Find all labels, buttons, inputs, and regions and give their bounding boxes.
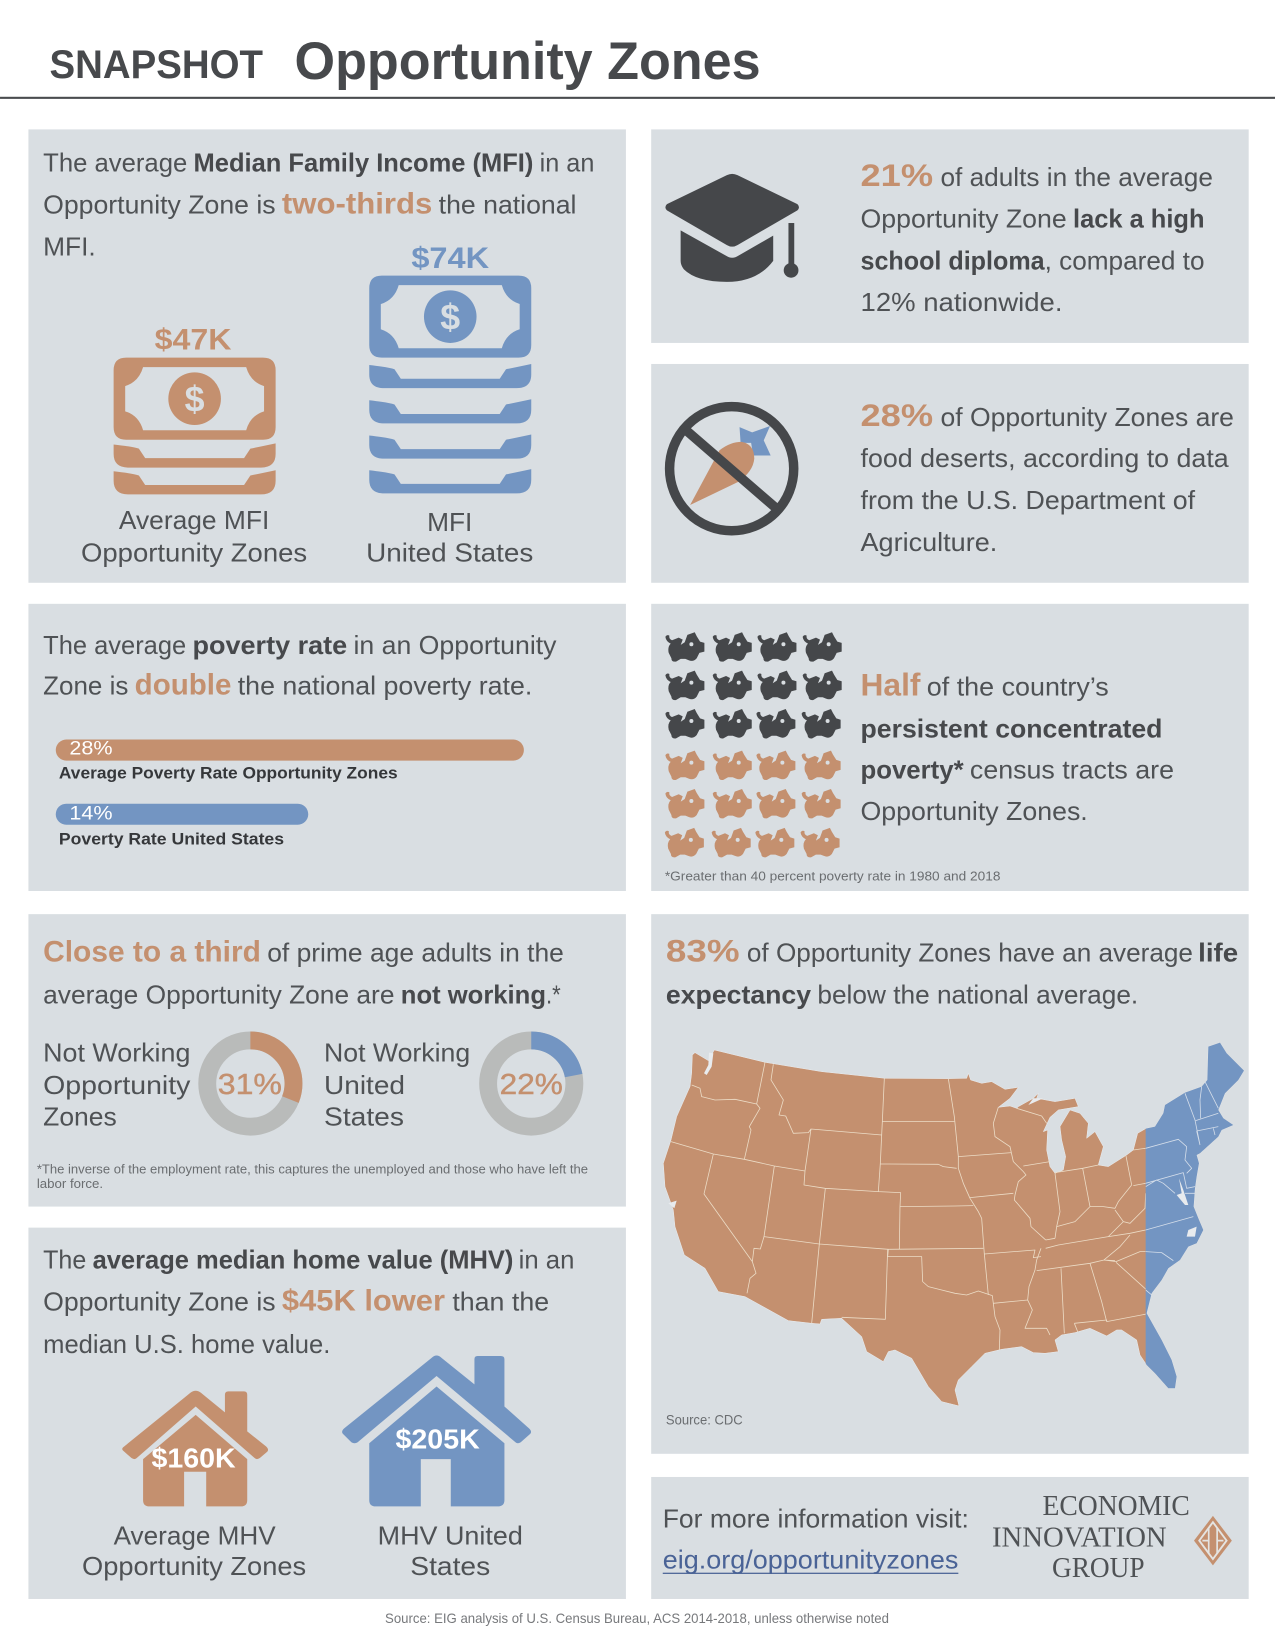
label: average MFI opportunity zones bbox=[81, 505, 307, 568]
text: food desert statement: of Opportunity Zones are bbox=[940, 402, 1234, 432]
text: home value statement: Opportunity Zone is bbox=[43, 1287, 276, 1317]
text: home value statement: The bbox=[43, 1245, 86, 1275]
text: life expectancy statement: life bbox=[1198, 937, 1238, 967]
panel: median family income bbox=[28, 129, 626, 583]
text: poverty tracts statement: poverty* bbox=[861, 754, 964, 784]
text: income statement bbox=[43, 147, 594, 262]
label: not working opportunity zones: Opportunity bbox=[43, 1070, 191, 1100]
text: diploma statement: lack a high bbox=[1073, 204, 1205, 234]
panel: poverty rate bbox=[28, 604, 626, 891]
text: not working statement: Close to a third bbox=[43, 935, 261, 968]
label: average MFI opportunity zones: Average MFI bbox=[119, 505, 269, 535]
label: MHV united states: States bbox=[410, 1551, 490, 1581]
donut chart: 22%: 22% bbox=[500, 1069, 563, 1101]
text: poverty statement: the national poverty rate. bbox=[238, 670, 532, 700]
logo: economic innovation group wordmark bbox=[992, 1491, 1190, 1584]
logo: economic innovation group wordmark: GROUP bbox=[1052, 1553, 1145, 1584]
text: poverty statement bbox=[43, 630, 557, 701]
text: income statement: two-thirds bbox=[282, 188, 432, 221]
footnote: inverse of employment rate bbox=[37, 1162, 588, 1191]
icon: tan money stack $47K: $47K bbox=[155, 323, 231, 356]
bar: united states 14%: 14% bbox=[69, 803, 113, 824]
label: not working united states: Not Working bbox=[324, 1037, 470, 1067]
text: income statement: the national bbox=[439, 190, 576, 220]
panel: not working bbox=[28, 914, 626, 1207]
panel: more information and logo bbox=[651, 1477, 1249, 1599]
text: poverty tracts statement: Opportunity Zones. bbox=[861, 796, 1088, 826]
text: home value statement: than the bbox=[452, 1287, 549, 1317]
text: diploma statement: 12% nationwide. bbox=[861, 287, 1062, 317]
icon: blue money stack $74K: $74K bbox=[411, 242, 489, 275]
logo: economic innovation group wordmark: INNOVATION bbox=[992, 1522, 1167, 1553]
text: poverty statement: The average bbox=[43, 630, 186, 660]
bar: opportunity zones 28%: Average Poverty Rate Opportunity Zones bbox=[59, 764, 398, 782]
text: income statement: MFI. bbox=[43, 232, 96, 262]
text: not working statement: .* bbox=[546, 980, 561, 1010]
water: puget sound, chesapeake and pamlico sounds bbox=[668, 1053, 1197, 1237]
icon: tan house $160K bbox=[122, 1391, 268, 1506]
text: food desert statement: from the U.S. Department of bbox=[861, 485, 1196, 515]
text: income statement: The average bbox=[43, 147, 187, 177]
text: poverty tracts statement bbox=[861, 666, 1174, 826]
icon: blue money stack $74K: $ bbox=[440, 297, 460, 337]
label: not working opportunity zones: Zones bbox=[43, 1102, 117, 1132]
icon: blue house $205K bbox=[342, 1355, 531, 1506]
label: snapshot: SNAPSHOT bbox=[49, 43, 263, 87]
text: diploma statement: , compared to bbox=[1045, 245, 1205, 275]
icon: blue money stack $74K bbox=[369, 242, 531, 493]
text: food desert statement: food deserts, according to data bbox=[861, 443, 1229, 473]
label: average MHV opportunity zones bbox=[82, 1520, 306, 1581]
footnote: inverse of employment rate: labor force. bbox=[37, 1177, 103, 1191]
text: diploma statement bbox=[861, 157, 1213, 317]
label: not working opportunity zones: Not Working bbox=[43, 1037, 190, 1067]
logo: diamond emblem bbox=[1194, 1516, 1232, 1565]
donut chart: 22% bbox=[488, 1040, 574, 1127]
text: not working statement: of prime age adults in the bbox=[267, 937, 564, 967]
text: poverty statement: Zone is bbox=[43, 670, 128, 700]
text: poverty tracts statement: persistent concentrated bbox=[861, 713, 1162, 743]
donut chart: 31% bbox=[207, 1040, 294, 1127]
text: home value statement: in an bbox=[519, 1245, 574, 1275]
text: home value statement: $45K lower bbox=[282, 1285, 446, 1318]
text: diploma statement: 21% bbox=[861, 157, 933, 193]
text: life expectancy statement: below the national average. bbox=[817, 980, 1138, 1010]
icon: tan house $160K: $160K bbox=[151, 1442, 236, 1473]
text: income statement: Opportunity Zone is bbox=[43, 190, 276, 220]
text: home value statement: median U.S. home value. bbox=[43, 1329, 330, 1359]
label: MHV united states bbox=[378, 1520, 523, 1581]
panel: median home value bbox=[28, 1228, 626, 1599]
bar: opportunity zones 28% bbox=[56, 738, 524, 782]
text: life expectancy statement: 83% bbox=[666, 932, 740, 968]
panel: high school diploma bbox=[651, 129, 1249, 343]
text: food desert statement: 28% bbox=[861, 397, 933, 433]
label: not working united states bbox=[324, 1037, 470, 1132]
label: MFI united states: United States bbox=[366, 538, 533, 568]
icon: tan money stack $47K: $ bbox=[185, 379, 205, 419]
bar chart: poverty rates bbox=[56, 738, 524, 849]
bar: united states 14% bbox=[56, 803, 308, 849]
text: poverty tracts statement: Half bbox=[861, 666, 921, 702]
text: poverty statement: double bbox=[135, 668, 231, 701]
text: poverty statement: in an Opportunity bbox=[353, 630, 557, 660]
label: average MFI opportunity zones: Opportunity Zones bbox=[81, 538, 307, 568]
header: snapshot title bbox=[49, 32, 761, 91]
text: diploma statement: of adults in the average bbox=[940, 162, 1213, 192]
text: home value statement bbox=[43, 1245, 574, 1359]
icon: tan money stack $47K bbox=[114, 323, 276, 494]
footnote: poverty definition: *Greater than 40 percent poverty rate in 1980 and 2018 bbox=[665, 869, 1000, 883]
text: home value statement: average median home value (MHV) bbox=[93, 1245, 513, 1275]
label: MFI united states: MFI bbox=[427, 507, 472, 537]
icon: graduation cap bbox=[665, 174, 799, 282]
label: average MHV opportunity zones: Opportunity Zones bbox=[82, 1551, 306, 1581]
icon: crossed-out carrot bbox=[670, 407, 794, 531]
text: food desert statement bbox=[861, 397, 1234, 557]
panel: life expectancy bbox=[651, 914, 1249, 1454]
text: income statement: in an bbox=[540, 147, 594, 177]
footer source note: Source: EIG analysis of U.S. Census Bureau, ACS 2014-2018, unless otherwise noted bbox=[385, 1611, 889, 1626]
text: income statement: Median Family Income (MFI) bbox=[194, 147, 533, 177]
text: not working statement: average Opportunity Zone are bbox=[43, 980, 394, 1010]
label: not working opportunity zones bbox=[43, 1037, 191, 1132]
label: MHV united states: MHV United bbox=[378, 1520, 523, 1550]
panel: food deserts bbox=[651, 364, 1249, 583]
text: more information: For more information visit: bbox=[663, 1503, 969, 1533]
logo: economic innovation group wordmark: ECONOMIC bbox=[1043, 1491, 1190, 1522]
label: average MHV opportunity zones: Average MHV bbox=[114, 1520, 276, 1550]
icon: blue house $205K: $205K bbox=[396, 1424, 480, 1455]
text: life expectancy statement: of Opportunity Zones have an average bbox=[747, 937, 1193, 967]
panel: concentrated poverty bbox=[651, 604, 1249, 891]
label: MFI united states bbox=[366, 507, 533, 568]
map: contiguous United States bbox=[663, 1043, 1244, 1406]
bar: opportunity zones 28%: 28% bbox=[69, 738, 113, 759]
footnote: inverse of employment rate: *The inverse of the employment rate, this captures the unemployed and those who have left the bbox=[37, 1162, 588, 1176]
text: diploma statement: Opportunity Zone bbox=[861, 204, 1067, 234]
text: not working statement: not working bbox=[401, 980, 546, 1010]
source: CDC: Source: CDC bbox=[666, 1412, 743, 1427]
title: Opportunity Zones bbox=[295, 32, 761, 91]
icon grid: piggy banks bbox=[665, 632, 842, 857]
text: life expectancy statement: expectancy bbox=[666, 980, 811, 1010]
label: not working united states: States bbox=[324, 1102, 404, 1132]
text: poverty statement: poverty rate bbox=[193, 630, 347, 660]
donut chart: 31%: 31% bbox=[218, 1069, 282, 1101]
bar: united states 14%: Poverty Rate United States bbox=[59, 831, 284, 849]
text: poverty tracts statement: census tracts are bbox=[970, 754, 1174, 784]
text: food desert statement: Agriculture. bbox=[861, 527, 997, 557]
text: poverty tracts statement: of the country’s bbox=[927, 671, 1109, 701]
label: not working united states: United bbox=[324, 1070, 405, 1100]
text: diploma statement: school diploma bbox=[861, 245, 1045, 275]
link: website: eig.org/opportunityzones bbox=[663, 1544, 958, 1574]
text: not working statement bbox=[43, 935, 564, 1010]
text: life expectancy statement bbox=[666, 932, 1238, 1010]
